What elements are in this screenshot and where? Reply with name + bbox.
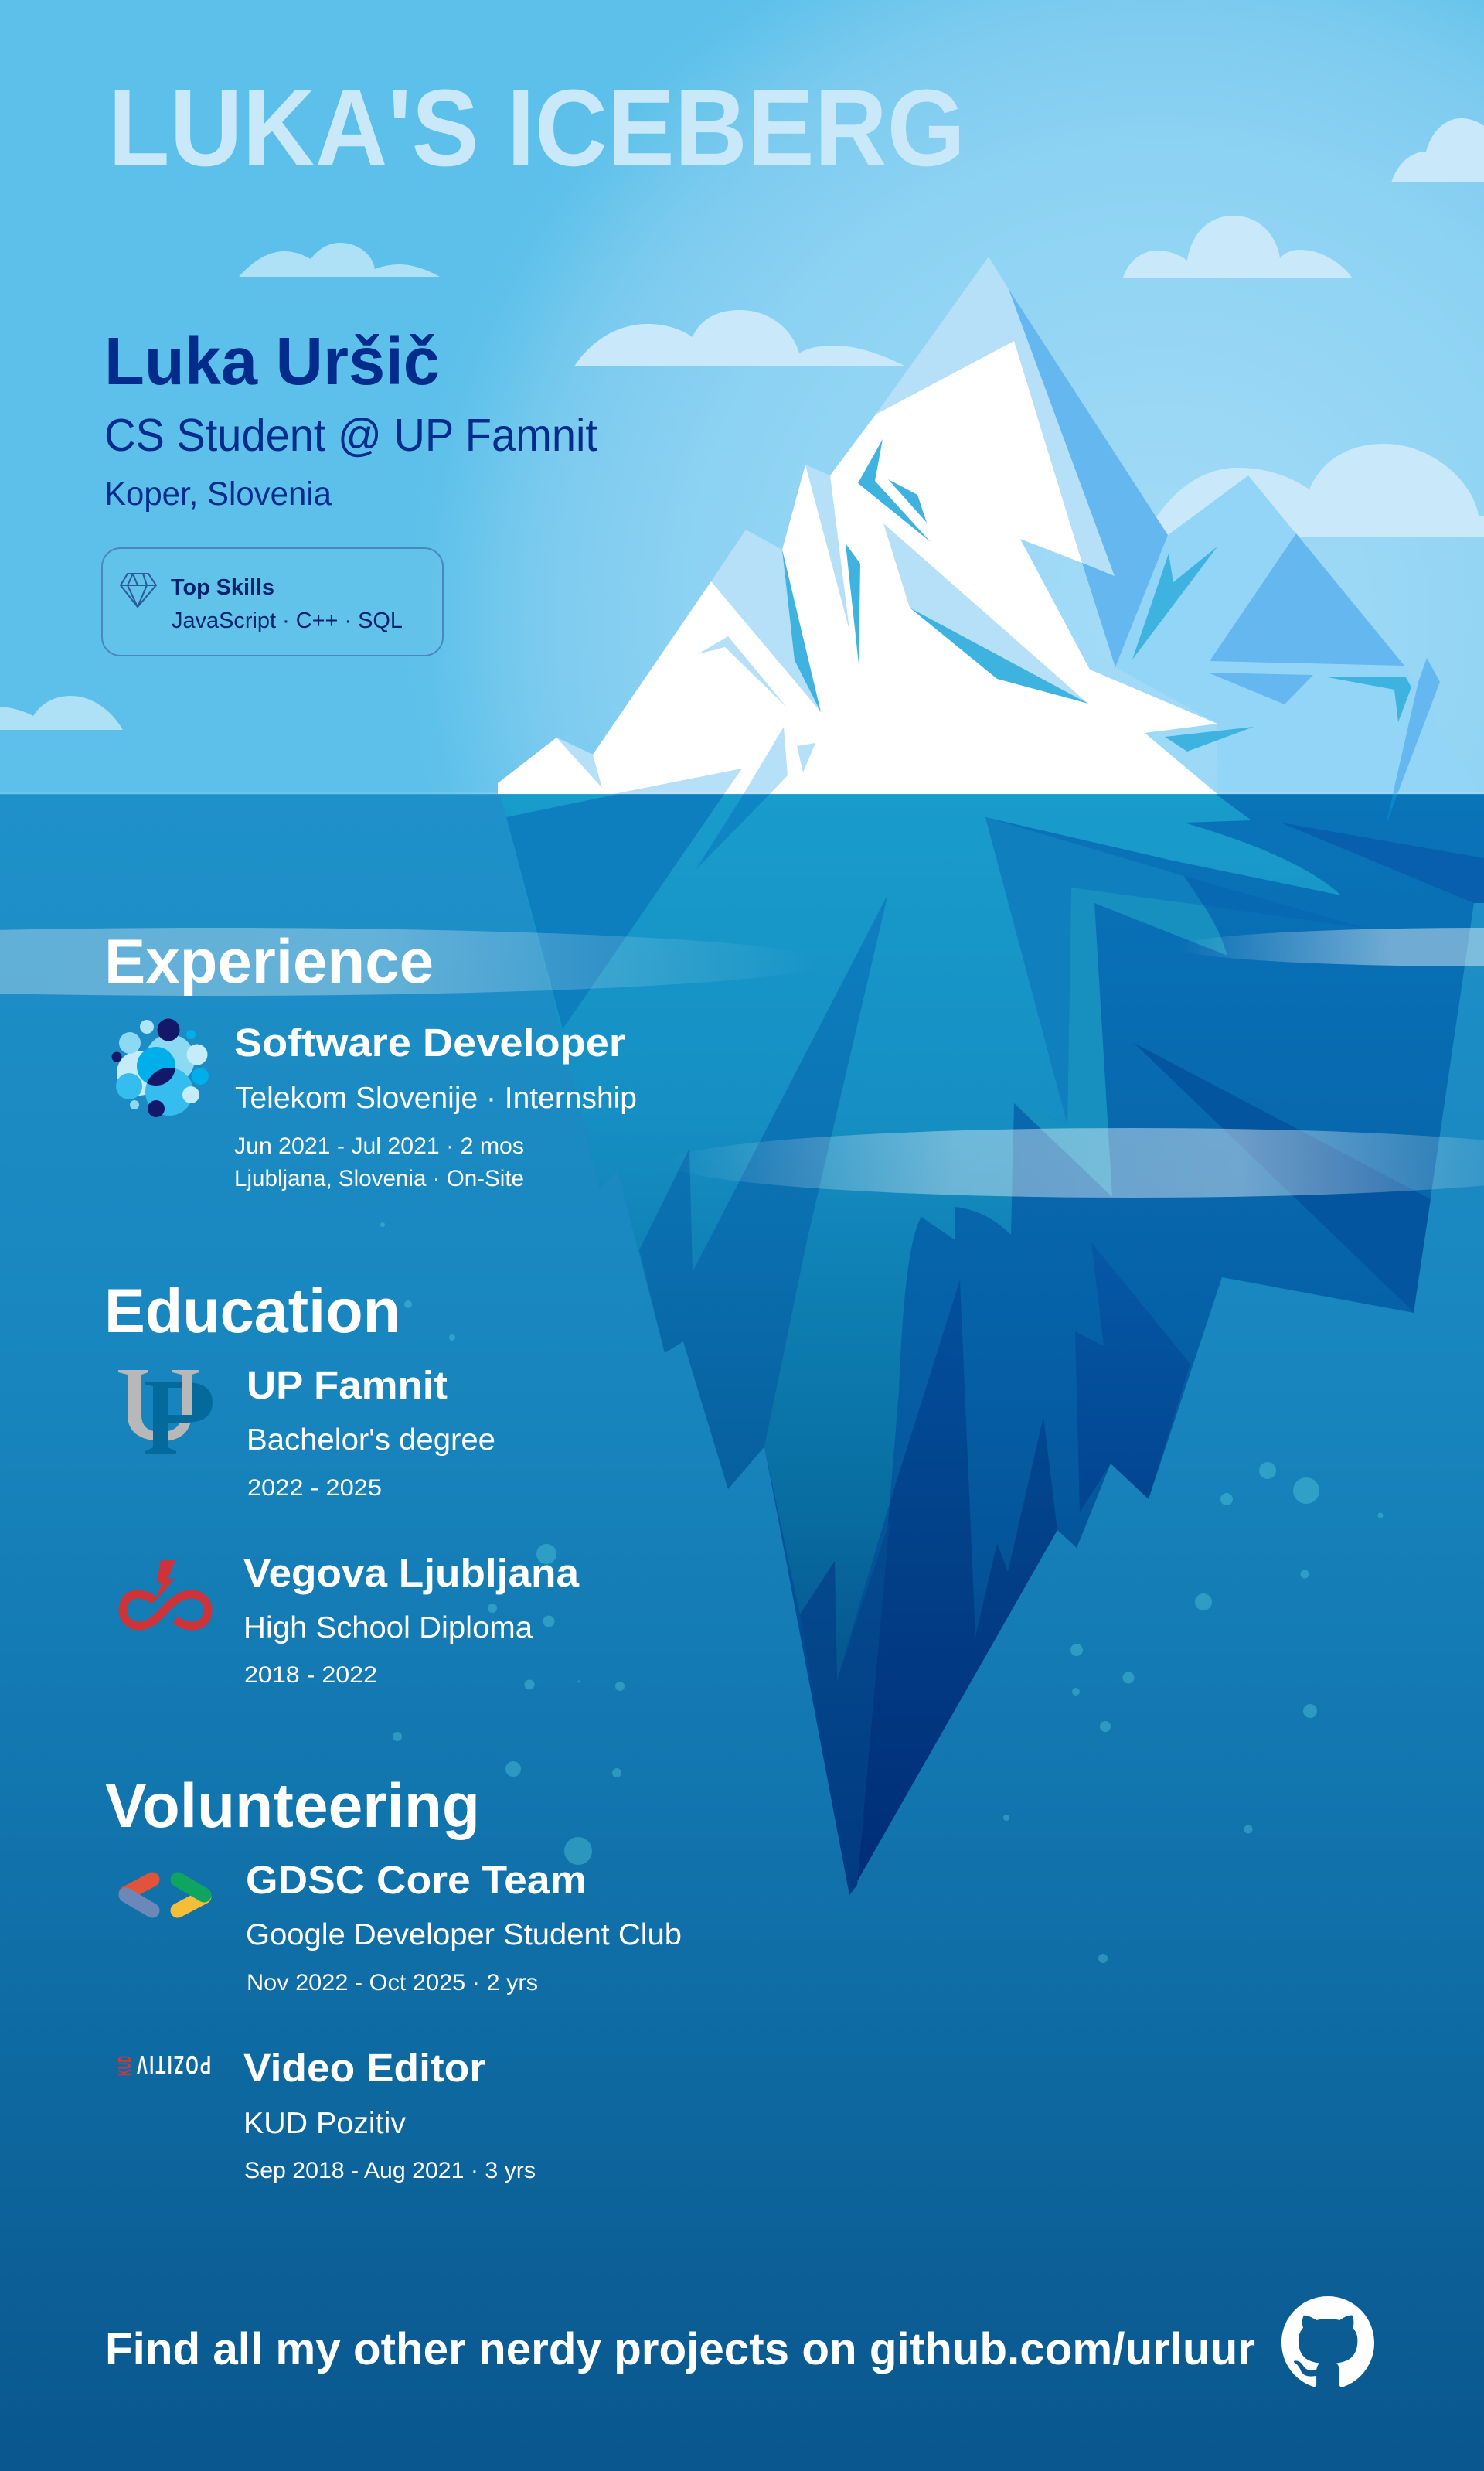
water <box>0 794 1484 2471</box>
degree: Bachelor's degree <box>247 1423 495 1457</box>
iceberg above water <box>498 257 1254 794</box>
dates: 2022 - 2025 <box>247 1475 382 1501</box>
organisation: Google Developer Student Club <box>246 1918 682 1951</box>
footer <box>105 2296 1374 2387</box>
heading: Volunteering <box>105 1771 480 1841</box>
school: UP Famnit <box>247 1363 448 1407</box>
light bands in the water <box>0 928 1484 1198</box>
icon: diamond <box>121 574 156 607</box>
title: LUKA'S ICEBERG <box>108 66 965 189</box>
sky background <box>0 0 1484 795</box>
icon: UP logo <box>118 1370 213 1454</box>
organisation: KUD Pozitiv <box>243 2107 407 2140</box>
profile header <box>104 324 597 513</box>
section: experience <box>104 927 637 1191</box>
top skills card <box>102 548 443 656</box>
dates: Nov 2022 - Oct 2025 · 2 yrs <box>247 1970 538 1996</box>
location: Koper, Slovenia <box>104 475 332 513</box>
iceberg below water <box>500 794 1484 1895</box>
dates: Sep 2018 - Aug 2021 · 3 yrs <box>244 2158 536 2183</box>
dates: 2018 - 2022 <box>244 1662 377 1688</box>
role: Software Developer <box>234 1021 625 1065</box>
icon: Telekom Slovenije logo <box>111 1019 209 1117</box>
clouds <box>0 118 1484 730</box>
role: Video Editor <box>243 2046 485 2090</box>
company: Telekom Slovenije · Internship <box>235 1082 637 1115</box>
name: Luka Uršič <box>104 324 440 399</box>
bubbles <box>380 1222 1384 1963</box>
footer call to action: Find all my other nerdy projects on github.com/urluur <box>105 2324 1255 2374</box>
top skills label: Top Skills <box>171 575 274 600</box>
role: CS Student @ UP Famnit <box>104 410 597 461</box>
icon: KUD Pozitiv logo: KUD <box>114 2056 134 2076</box>
icon: GDSC logo <box>126 1880 204 1910</box>
location: Ljubljana, Slovenia · On-Site <box>234 1166 524 1191</box>
skills list: JavaScript · C++ · SQL <box>172 608 403 633</box>
heading: Education <box>104 1276 400 1346</box>
dates: Jun 2021 - Jul 2021 · 2 mos <box>234 1133 524 1159</box>
section: education <box>104 1276 580 1688</box>
role: GDSC Core Team <box>246 1858 587 1902</box>
degree: High School Diploma <box>243 1611 533 1644</box>
section: volunteering <box>105 1771 682 2183</box>
icon: KUD Pozitiv logo: POZITIV <box>137 2050 211 2080</box>
icon: GitHub <box>1281 2296 1374 2387</box>
school: Vegova Ljubljana <box>243 1551 580 1595</box>
waterline highlight <box>0 792 1484 795</box>
back mountain <box>1115 475 1479 794</box>
icon: Vegova logo <box>123 1560 208 1626</box>
heading: Experience <box>104 927 434 997</box>
